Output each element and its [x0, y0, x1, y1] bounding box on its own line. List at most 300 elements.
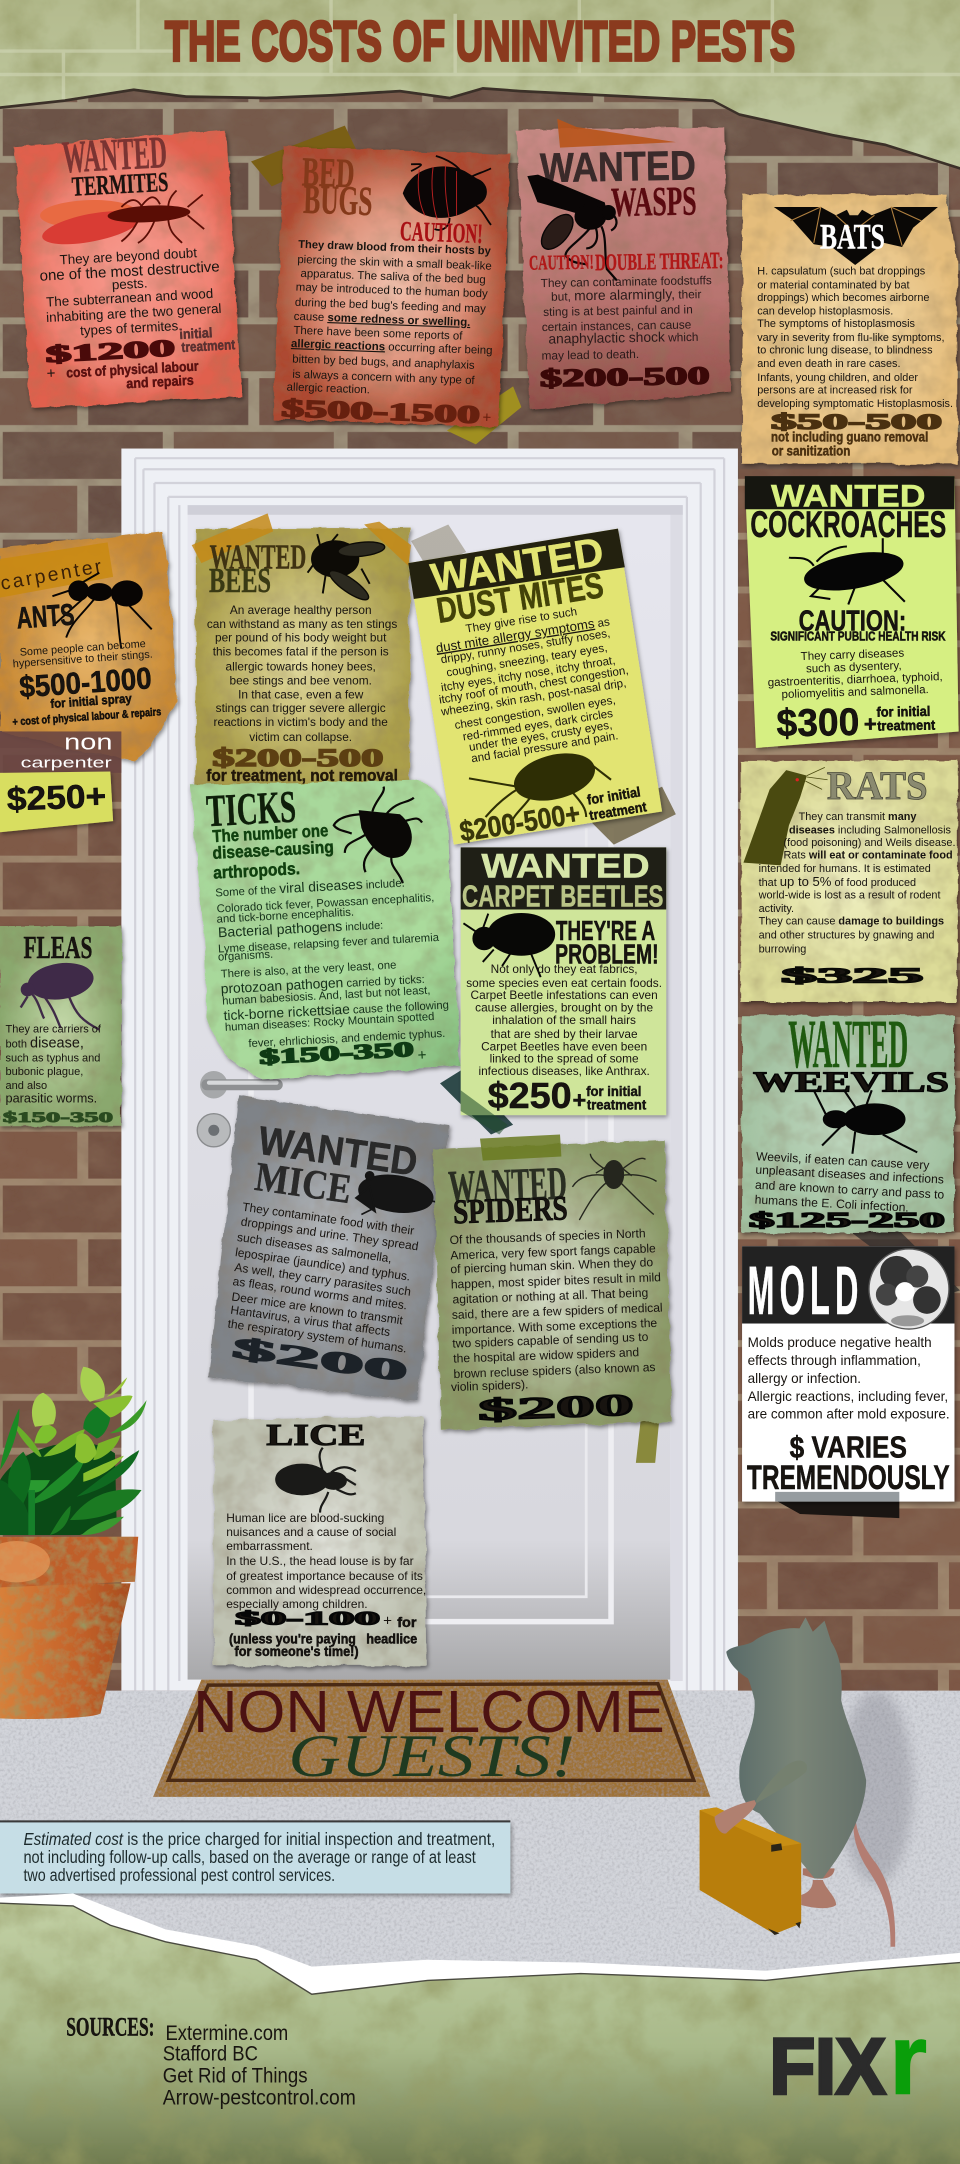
text block: Lyme disease, relapsing fever and tularemia: [218, 932, 440, 956]
logo: fixr: r: [890, 2005, 927, 2116]
icon: spider: [572, 1154, 657, 1220]
text block: chest congestion, swollen eyes,: [454, 695, 617, 732]
cost: weevils: $125-250: [749, 1210, 945, 1232]
cost: cockroaches: for initial: [876, 704, 930, 720]
text block: itchy roof of mouth, chest congestion,: [438, 665, 629, 707]
text block: The subterranean and wood: [46, 286, 214, 310]
cost: dust mites: [458, 784, 648, 849]
cost: bats: $50-500: [771, 409, 942, 434]
tape: spiders: [480, 1134, 561, 1161]
text block: [541, 273, 712, 363]
text block: diseases including Salmonellosis: [789, 825, 952, 837]
heading: bed bugs: [301, 148, 373, 224]
subheading: number one: disease-causing: [212, 836, 334, 863]
cost: bed bugs: [281, 395, 492, 429]
icon: rat: [743, 767, 828, 865]
text block: certain instances, can cause: [542, 318, 692, 334]
cost: bats: or sanitization: [772, 443, 850, 458]
text: non welcome: NON WELCOME: [193, 1678, 665, 1745]
text block: reactions in victim's body and the: [214, 715, 388, 729]
text block: agitation or nothing at all. That being: [452, 1286, 648, 1306]
text block: They contaminate food with their: [241, 1200, 415, 1238]
text block: allergic reaction.: [286, 381, 370, 396]
text block: the respiratory system of humans.: [227, 1317, 408, 1356]
cost: termites: $1200: [45, 335, 176, 368]
text block: one of the most destructive: [39, 258, 220, 285]
text block: In that case, even a few: [238, 687, 364, 701]
text block: [768, 647, 943, 701]
text block: [215, 875, 449, 1050]
icon: bat: [774, 207, 938, 265]
cost: dust mites: treatment: [588, 799, 648, 823]
cost: carpenter ants: + cost of physical labour & repairs: [12, 706, 162, 729]
text block: of greatest importance because of its: [226, 1569, 423, 1583]
text block: burrowing: [759, 943, 806, 955]
cost: mold: [747, 1431, 950, 1497]
text block: organisms.: [218, 949, 273, 964]
text block: red-rimmed eyes, dark circles: [462, 708, 614, 744]
text block: allergic towards honey bees,: [226, 660, 376, 674]
poster: rats: [741, 760, 957, 1002]
plant in terracotta pot: [0, 1367, 147, 1719]
cost: mold: $ VARIES: [790, 1431, 907, 1464]
estimated cost note: [0, 1820, 510, 1894]
text block: There have been some reports of: [293, 325, 463, 343]
text block: They can cause damage to buildings: [759, 916, 944, 928]
heading: lice: LICE: [266, 1418, 366, 1452]
text block: as fleas, round worms and mites.: [232, 1274, 408, 1312]
text block: per pound of his body weight but: [215, 631, 387, 645]
leaves: [0, 1367, 147, 1535]
text block: some species even eat certain foods.: [466, 976, 662, 990]
heading: bed bugs: BUGS: [303, 176, 373, 224]
text block: vary in severity from flu-like symptoms,: [757, 332, 945, 344]
heading: ants: ANTS: [15, 599, 76, 636]
icon: wasp: [528, 175, 617, 280]
cost: bees: for treatment, not removal: [206, 766, 398, 785]
text block: bee stings and bee venom.: [229, 674, 372, 688]
estimated cost note: Estimated cost is the price charged for initial inspection and treatment,: [23, 1829, 495, 1849]
text block: and tick-borne encephalitis.: [216, 907, 354, 926]
text block: that up to 5% of food produced: [759, 874, 916, 889]
callout: caution public health: [770, 606, 946, 643]
cost: cockroaches: $300: [776, 701, 860, 745]
text block: Hantavirus, a virus that affects: [230, 1303, 391, 1339]
text block: allergic reactions occurring after being: [291, 338, 493, 357]
text block: such diseases as salmonella,: [236, 1230, 393, 1266]
subheading: number one: [212, 820, 334, 883]
heading: wanted bees: WANTED: [210, 539, 306, 577]
cost: lice: +: [383, 1613, 392, 1630]
text block: during the bed bug's feeding and may: [295, 297, 486, 315]
text block: America, very few sport fangs capable: [450, 1241, 656, 1262]
text block: human diseases: Rocky Mountain spotted: [225, 1011, 435, 1034]
text block: allergy or infection.: [748, 1371, 861, 1386]
text block: [466, 962, 662, 1078]
heading: bats: BATS: [820, 216, 885, 256]
heading: wanted termites: TERMITES: [71, 166, 169, 202]
text block: this becomes fatal if the person is: [213, 645, 389, 659]
text block: An average healthy person: [230, 603, 372, 617]
icon: cockroach: [789, 538, 906, 604]
concrete floor: [0, 1691, 960, 2001]
cost: carpenter ants: [12, 662, 162, 729]
text block: or material contaminated by bat: [757, 279, 910, 291]
text block: (food poisoning) and Weils disease.: [783, 837, 955, 849]
text block: drippy, runny noses, stuffy noses,: [440, 628, 611, 666]
poster: bed bugs: [273, 146, 510, 429]
text block: victim can collapse.: [249, 730, 352, 744]
front foot: [801, 1880, 836, 1908]
cost: cockroaches: +: [864, 711, 877, 737]
text block: stings can trigger severe allergic: [216, 701, 386, 715]
cost: ticks: +: [417, 1047, 427, 1064]
text block: [6, 1023, 102, 1106]
tape behind posters: [251, 126, 960, 1518]
label panel: non carpenter: carpenter: [21, 754, 112, 771]
heading: wanted spiders: WANTED: [447, 1158, 568, 1214]
brick wall background: [0, 83, 960, 1711]
text block: Molds produce negative health: [748, 1335, 932, 1350]
icon: bed bug: [403, 156, 491, 230]
text block: itchy eyes, itchy nose, itchy throat,: [440, 655, 616, 694]
cost: carpet beetles: [488, 1076, 647, 1116]
poster: ticks: [190, 780, 459, 1079]
text block: [12, 638, 153, 670]
label: carpenter: carpenter: [0, 556, 104, 595]
suitcase: [700, 1807, 801, 1934]
text block: lepospirae (jaundice) and typhus.: [234, 1245, 411, 1284]
text block: persons are at increased risk for: [757, 384, 913, 396]
icon: mouse: [356, 1171, 450, 1217]
heading: wanted weevils: WEEVILS: [753, 1067, 949, 1099]
heading: wanted wasps: WANTED: [540, 142, 696, 191]
cost: wasps: $200-500: [540, 363, 710, 393]
sources list: Arrow-pestcontrol.com: [163, 2086, 356, 2110]
text block: inhalation of the small hairs: [492, 1013, 636, 1027]
poster: termites: [15, 126, 241, 409]
heading: wanted mice: MICE: [252, 1153, 354, 1212]
text block: [286, 239, 493, 396]
text block: They are beyond doubt: [59, 245, 198, 267]
text block: [754, 1149, 945, 1215]
text block: cause some redness or swelling.: [294, 311, 471, 329]
shadow: [839, 1690, 913, 1883]
poster: mold: [742, 1246, 954, 1502]
text block: and other structures by gnawing and: [759, 929, 935, 941]
text block: As well, they carry parasites such: [234, 1260, 412, 1299]
callout: they're a problem: [555, 915, 659, 969]
cost: bed bugs: +: [482, 409, 492, 426]
text block: apparatus. The saliva of the bed bug: [300, 268, 486, 286]
cost: cockroaches: [776, 701, 936, 745]
band: black heading: [408, 529, 625, 599]
text block: developing symptomatic Histoplasmosis.: [757, 398, 953, 410]
cost: carpet beetles: +: [572, 1087, 586, 1113]
cost: ticks: [259, 1039, 427, 1069]
band: black heading: [461, 847, 666, 909]
text block: of piercing human skin. When they do: [450, 1255, 654, 1276]
icon: tick: [334, 787, 422, 883]
text block: infectious diseases, like Anthrax.: [478, 1064, 650, 1078]
text block: [435, 606, 629, 765]
text block: pests.: [111, 276, 148, 292]
icon: mold petri dish: [869, 1249, 949, 1329]
callout: they're a problem: THEY'RE A: [556, 915, 655, 946]
heading: wanted mice: [252, 1119, 420, 1212]
poster: fleas: [0, 926, 121, 1126]
sources list: [163, 2021, 356, 2110]
text block: Weevils, if eaten can cause very: [756, 1149, 931, 1172]
heading: wanted termites: [61, 126, 169, 202]
heading: wanted termites: WANTED: [61, 126, 168, 182]
door handle and lock: [197, 1071, 283, 1147]
text block: In the U.S., the head louse is by far: [226, 1554, 414, 1568]
back foot: [803, 1868, 834, 1879]
text block: and are known to carry and pass to: [755, 1178, 945, 1202]
arm: [756, 1761, 807, 1803]
text block: common and widespread occurrence,: [226, 1583, 426, 1597]
cost: termites: and repairs: [126, 373, 194, 391]
icon: weevil: [814, 1090, 917, 1154]
text block: [207, 603, 397, 744]
text block: wheezing, skin rash, post-nasal drip,: [439, 677, 627, 719]
label panel: non carpenter: non: [64, 729, 112, 754]
heading: wanted bees: [209, 539, 306, 600]
tail: [853, 1808, 895, 1947]
text block: and also: [6, 1080, 47, 1092]
text block: parasitic worms.: [6, 1092, 97, 1106]
icon: carpet beetle: [463, 914, 554, 977]
cost: rats: $325: [781, 966, 923, 988]
text block: both disease,: [6, 1035, 84, 1051]
text block: types of termites.: [80, 318, 182, 338]
subheading: number one: arthropods.: [213, 858, 300, 883]
callout: they're a problem: PROBLEM!: [555, 938, 659, 969]
heading: wanted weevils: [753, 1006, 949, 1099]
cost: carpenter ants: for initial spray: [50, 691, 132, 711]
heading: wanted wasps: WASPS: [611, 178, 697, 225]
text block: especially among children.: [226, 1597, 368, 1611]
cost panel: non carpenter ants: $250+: [6, 778, 107, 818]
cost: fleas: $150-350: [3, 1109, 113, 1126]
heading: rats: RATS: [827, 763, 928, 808]
poster: dust mites: [408, 529, 662, 849]
cost: carpenter ants: $500-1000: [18, 662, 153, 704]
poster: bees: [192, 513, 411, 787]
poster: carpenter ants: [0, 531, 177, 760]
tape: carpenter label: [0, 542, 113, 598]
door mat: [153, 1678, 710, 1797]
sources list: Get Rid of Things: [163, 2064, 308, 2088]
text block: and even death in rare cases.: [757, 358, 900, 370]
text block: sting is at best painful and in: [543, 302, 693, 319]
icon: ant: [52, 573, 152, 649]
text block: is always a concern with any type of: [292, 369, 476, 387]
text block: Rats will eat or contaminate food: [783, 849, 953, 861]
text block: tick-borne rickettsiae cause the following: [223, 996, 449, 1023]
text block: anaphylactic shock which: [548, 329, 699, 347]
heading: wanted spiders: [447, 1158, 568, 1231]
cost: dust mites: $200-500+: [458, 798, 582, 849]
text block: linked to the spread of some: [490, 1052, 639, 1066]
text block: two spiders capable of sending us to: [452, 1330, 649, 1351]
text block: Infants, young children, and older: [757, 372, 918, 384]
heading: wanted spiders: SPIDERS: [452, 1189, 568, 1231]
text block: are common after mold exposure.: [748, 1407, 950, 1422]
icon: flea: [21, 959, 99, 1030]
pot: [0, 1537, 138, 1719]
text block: They can contaminate foodstuffs: [541, 273, 712, 290]
cost: termites: [45, 325, 236, 391]
heading: fleas: FLEAS: [23, 930, 92, 965]
text block: bubonic plague,: [6, 1066, 83, 1078]
poster: spiders: [433, 1134, 672, 1430]
poster: carpet beetles: [461, 847, 666, 1134]
text block: may be introduced to the human body: [296, 282, 488, 300]
heading: wanted cockroaches: WANTED: [771, 477, 926, 513]
callout: double threat: CAUTION!: [529, 252, 594, 275]
text block: violin spiders).: [451, 1377, 529, 1394]
band: black heading: [745, 476, 954, 509]
cost: lice: headlice: [366, 1632, 418, 1647]
estimated cost note: two advertised professional pest control services.: [23, 1865, 335, 1885]
text block: They carry diseases: [800, 647, 905, 663]
sources list: Extermine.com: [166, 2021, 288, 2045]
heading: mold: MOLD: [747, 1252, 864, 1329]
text block: Carpet Beetle infestations can even: [471, 988, 658, 1002]
text block: Of the thousands of species in North: [449, 1226, 646, 1247]
sources label: SOURCES:: [66, 2013, 154, 2042]
cost: termites: +: [46, 365, 56, 382]
estimated cost note: not including follow-up calls, based on the average or range of at least: [23, 1847, 476, 1867]
text block: Human lice are blood-sucking: [226, 1511, 384, 1525]
text block: Some of the viral diseases include:: [215, 875, 405, 900]
sources list: Stafford BC: [163, 2041, 258, 2065]
logo: fixr: FIX: [770, 2023, 886, 2111]
cost: carpet beetles: $250: [488, 1076, 572, 1116]
text block: cause allergies, brought on by the: [475, 1001, 654, 1015]
poster: lice: [214, 1416, 426, 1666]
text block: protozoan pathogen carried by ticks:: [220, 971, 425, 996]
text block: to chronic lung disease, to blindness: [757, 344, 933, 356]
text block: poliomyelitis and salmonella.: [781, 684, 929, 701]
icon: louse: [276, 1448, 356, 1513]
band: black heading: [742, 1246, 954, 1324]
tape: over carpet beetles: [461, 1090, 508, 1134]
text block: They give rise to such: [465, 606, 578, 636]
text block: [226, 1511, 426, 1611]
text block: can withstand as many as ten stings: [207, 617, 397, 631]
text block: unpleasant diseases and infections: [755, 1163, 944, 1187]
text block: [449, 1226, 663, 1394]
cost: dust mites: for initial: [586, 784, 642, 808]
heading: bed bugs: BED: [301, 148, 355, 196]
text block: inhabiting are the two general: [46, 301, 222, 325]
subheading: number one: The number one: [212, 820, 329, 846]
text block: Deer mice are known to transmit: [231, 1289, 404, 1327]
bottom torn paper: [0, 1894, 960, 2164]
cost: bats: [771, 409, 942, 458]
heading: wanted dust mites: DUST MITES: [434, 565, 606, 631]
icon: dust mite: [469, 746, 611, 825]
hand: [715, 1800, 756, 1834]
text block: droppings and urine. They spread: [240, 1215, 419, 1253]
tape: bees: [192, 513, 411, 566]
text block: that are shed by their larvae: [491, 1027, 638, 1041]
heading: wanted wasps: [540, 142, 697, 225]
tape: over mold: [775, 1492, 899, 1502]
text block: The symptoms of histoplasmosis: [757, 318, 915, 330]
cost: lice: for someone's time!): [234, 1644, 359, 1659]
text block: dust mite allergy symptoms as: [435, 613, 611, 656]
poster: mice: [208, 1096, 450, 1401]
cost panel: non carpenter ants: [0, 771, 113, 832]
rat with suitcase: [700, 1617, 913, 1947]
text block: They draw blood from their hosts by: [298, 239, 492, 258]
text block: droppings) which becomes airborne: [757, 292, 929, 304]
cost: lice: [229, 1608, 418, 1659]
callout: double threat: DOUBLE THREAT:: [595, 248, 724, 276]
text block: and facial pressure and pain.: [470, 730, 619, 765]
cost: bed bugs: $500-1500: [281, 395, 480, 429]
cost: lice: (unless you're paying: [229, 1632, 356, 1647]
poster: cockroaches: [745, 476, 959, 748]
callout: double threat: [529, 248, 724, 276]
cost: bees: [206, 745, 398, 785]
text block: nuisances and a cause of social: [226, 1525, 396, 1539]
text block: Carpet Beetles have even been: [481, 1039, 647, 1053]
cost: carpet beetles: for initial: [586, 1084, 641, 1099]
heading: wanted cockroaches: [750, 477, 946, 545]
text block: effects through inflammation,: [748, 1353, 921, 1368]
text: guests: GUESTS!: [288, 1723, 575, 1790]
text block: intended for humans. It is estimated: [759, 863, 931, 875]
text block: such as dysentery,: [806, 660, 902, 675]
text block: [758, 811, 955, 955]
cost: lice: for: [397, 1615, 417, 1630]
body: [726, 1617, 866, 1878]
text block: happen, most spider bites result in mild: [451, 1270, 661, 1292]
text block: There is also, at the very least, one: [220, 959, 397, 981]
text block: under the eyes, crusty eyes,: [468, 719, 613, 754]
cost: termites: cost of physical labour: [66, 359, 199, 380]
text block: gastroenteritis, diarrhoea, typhoid,: [768, 671, 943, 689]
text block: They are carriers of: [6, 1023, 102, 1035]
cost: lice: $0-100: [235, 1608, 380, 1629]
text block: Not only do they eat fabrics,: [491, 962, 638, 976]
icon: bee: [308, 534, 385, 604]
text block: importance. With some exceptions the: [452, 1316, 658, 1337]
text block: hypersensitive to their stings.: [12, 649, 153, 670]
text block: such as typhus and: [6, 1052, 100, 1064]
text block: Bacterial pathogens include:: [218, 916, 384, 940]
text block: embarrassment.: [226, 1539, 313, 1553]
cost: carpet beetles: treatment: [587, 1098, 647, 1113]
cost: bats: not including guano removal: [771, 430, 928, 445]
logo: fixr: [770, 2005, 927, 2116]
heading: wanted carpet beetles: CARPET BEETLES: [462, 881, 663, 914]
text block: human babesiosis. And, last but not least,: [222, 985, 431, 1008]
cost: termites: treatment: [181, 337, 236, 355]
text block: [227, 1200, 419, 1356]
text block: Colorado tick fever, Powassan encephalitis,: [216, 892, 435, 915]
callout: caution: CAUTION!: [399, 215, 483, 249]
text block: world-wide is lost as a result of rodent: [758, 889, 941, 901]
label panel: non carpenter: [0, 729, 121, 773]
text block: piercing the skin with a small beak-like: [297, 254, 492, 273]
text block: fever, ehrlichiosis, and endemic typhus.: [248, 1028, 446, 1050]
